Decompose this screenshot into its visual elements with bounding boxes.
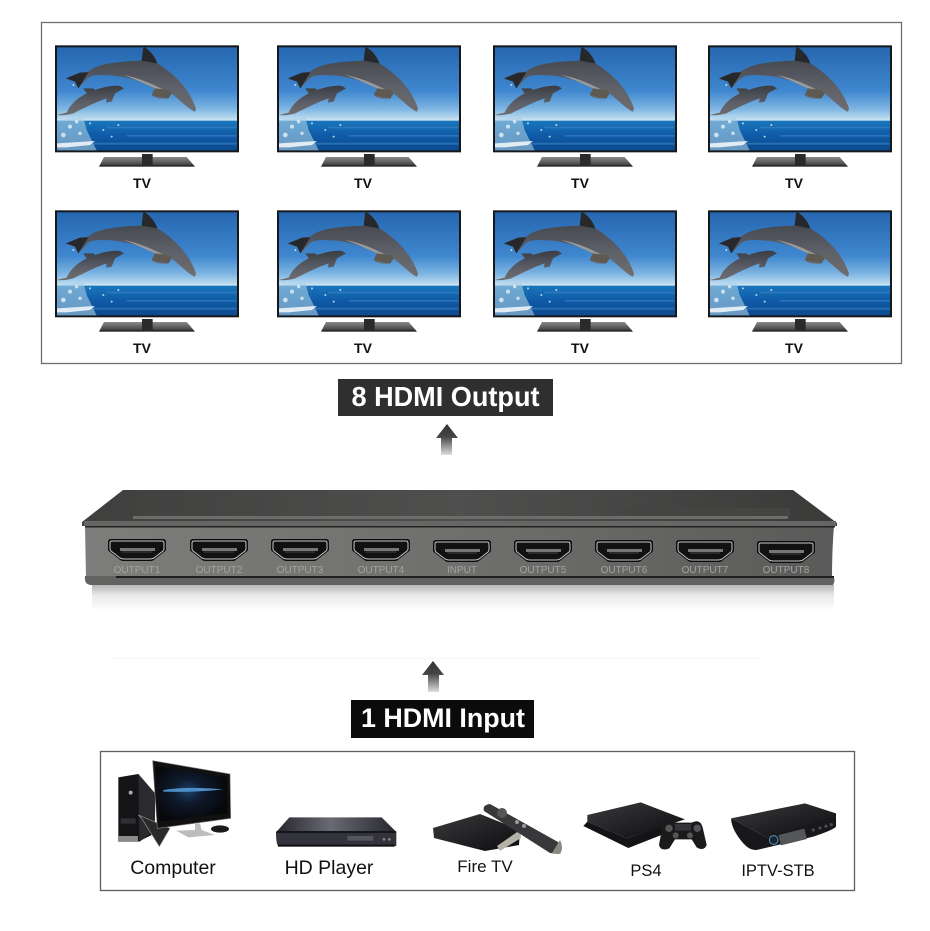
port labels: OUTPUT4: [358, 565, 405, 576]
TV 7: [493, 210, 677, 356]
label: HD Player: HD Player: [285, 857, 374, 879]
TV 2: [277, 45, 461, 191]
TV 5: TV: [133, 340, 152, 356]
label: IPTV-STB: IPTV-STB: [741, 862, 815, 880]
port labels: OUTPUT5: [520, 565, 567, 576]
device front face: [85, 525, 834, 578]
TV 4: [708, 45, 892, 191]
label: Fire TV: Fire TV: [457, 857, 513, 876]
TV 8: [708, 210, 892, 356]
port labels: OUTPUT3: [277, 565, 324, 576]
TV 3: [493, 45, 677, 191]
TV 4: TV: [785, 175, 804, 191]
panel: input sources: [100, 752, 854, 890]
port labels: OUTPUT7: [682, 565, 729, 576]
TV 6: TV: [354, 340, 373, 356]
TV 1: TV: [133, 175, 152, 191]
icon: Fire TV: [433, 804, 562, 854]
TV 7: TV: [571, 340, 590, 356]
TV 3: TV: [571, 175, 590, 191]
port labels: OUTPUT2: [196, 565, 243, 576]
port labels: INPUT: [447, 565, 477, 576]
panel: 8 TV outputs: [42, 22, 902, 364]
port labels: OUTPUT6: [601, 565, 648, 576]
TV 2: TV: [354, 175, 373, 191]
device top face: [82, 490, 837, 526]
TV 5: [55, 210, 239, 356]
heading: 8 HDMI Output: 8 HDMI Output: [352, 381, 540, 412]
arrow: up to outputs: [436, 424, 458, 455]
icon: computer: [118, 761, 231, 847]
HDMI ports: [108, 539, 815, 563]
TV 8: TV: [785, 340, 804, 356]
port labels: OUTPUT1: [114, 565, 161, 576]
TV 1: [55, 45, 239, 191]
icon: HD player: [276, 817, 396, 847]
icon: PS4 with controller: [583, 802, 707, 849]
port labels: [114, 565, 810, 576]
device shadow: [92, 585, 834, 611]
arrow: up to device: [422, 661, 444, 692]
label: Computer: Computer: [130, 857, 216, 879]
device: HDMI splitter: [82, 490, 837, 611]
TV 6: [277, 210, 461, 356]
port labels: OUTPUT8: [763, 565, 810, 576]
heading: 1 HDMI Input: 1 HDMI Input: [361, 703, 525, 733]
icon: IPTV set-top box: [731, 803, 836, 850]
label: PS4: PS4: [630, 862, 662, 880]
device bottom lip: [85, 576, 835, 585]
